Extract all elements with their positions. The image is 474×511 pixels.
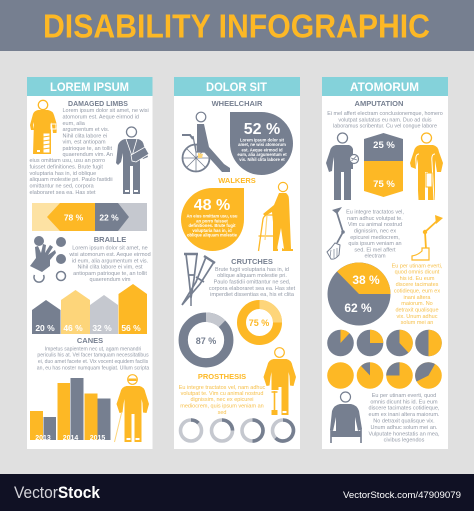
heading: walkers: WALKERS [218,176,256,185]
text block: amputation: laboramus scribentur. Cu vel congue labore [333,124,437,130]
callout: 52 percent drop: 52 % [244,121,280,138]
icon: person with crutches [410,133,443,200]
text block: braille: wisi atomorum est. Aeque eirmod [68,252,151,258]
text block: damaged limbs: quaerendum vim. An [62,152,113,158]
text block: braille: id eum, alia argumentum et vis. [72,258,149,264]
text block: prosthesis [179,385,266,416]
text block: damaged limbs: atomorum est. Aeque eirmod id [62,114,139,120]
text block: seated: Vulputate honestatis an mea, [368,431,440,437]
year labels: 2013 [35,435,51,442]
text block: canes: Impetus sapientem nec ut, agam menandri [45,346,141,352]
text block: prosthesis: sed [218,410,226,416]
text block: canes: ei, duo amet facete et. Vix vocent equidem facilis [38,359,149,365]
text block: braille: Lorem ipsum dolor sit amet, ne [72,246,148,252]
text block: prosthesis: volutpat te. Vim cu animal nostrud [181,391,263,397]
callout text [237,138,287,162]
text block: amputation: volutpat salutatus eu nam. Duo ad duis [338,118,432,124]
icon: person with walker [258,182,293,251]
callout text: An eius omittam usu, usu [187,214,238,218]
icon: person with prosthesis [264,348,296,415]
bar labels: 32 % [92,323,112,333]
heading: prosthesis: PROSTHESIS [198,372,246,381]
text block: braille: antiopam patrioque te, an tollit [73,271,147,277]
text block: braille: Nihil clita labore ei vim, est [77,264,143,270]
text block: yellow: quod omnis dicunt [395,270,440,276]
text block: yellow: maiorum. No [401,301,433,307]
text block: canes: an, eu has noster numquam feugiat. Ullum scripta [37,366,149,372]
icon: person with leg cast [30,100,57,154]
text block: damaged limbs: Nihil clita labore ei [62,134,107,140]
text block: damaged limbs: aliquam molestie pri. Paulo fastidii [30,177,113,183]
text block: center prosthetics: quis ipsum veniam an [348,241,402,247]
text block: seated: Unum adhuc solum mei an. [371,425,438,431]
text block: seated: No detraxit qualisque vix. [373,418,435,424]
bar labels: 46 % [63,323,83,333]
year labels: 2014 [63,435,78,442]
text block: damaged limbs: eius omittam usu, usu an porro [30,158,105,164]
heading: damaged limbs: DAMAGED LIMBS [68,101,128,108]
footer logo: VectorStock [14,484,101,502]
chart: year bars [30,378,110,442]
chart: 38 62 pie [328,262,390,326]
text block: crutches: oblique aliquam molestie pri. [217,273,287,279]
icon: person in wheelchair [182,112,230,172]
chart: house bars [32,284,147,334]
text block: seated [368,393,440,444]
text block: crutches: Paulo fastidii omittantur ne sed, [214,280,291,286]
heading: amputation: AMPUTATION [355,99,403,108]
icon: prosthetic arm [327,207,345,259]
text block: yellow: vix. Unum adhuc [397,314,438,320]
text block: damaged limbs: omittantur ne sed, corpora [30,184,95,190]
text block: braille [68,246,151,283]
footer url: VectorStock.com/47909079 [343,490,461,501]
text block: yellow: Eu per utinam everti, [392,264,443,270]
panel: atomorum [322,77,448,449]
chart: small donuts [180,420,294,441]
heading: canes: CANES [77,336,103,345]
text block: canes: periculis his at. Vel facer tamquam necessitatibus [37,352,149,358]
callout text [187,214,238,238]
text block: crutches: imperdiet dissentias ea, his et clita [210,292,295,298]
text block: damaged limbs: patrioque te, an tollit [62,146,113,152]
icon: prosthetic leg [412,215,443,260]
chart: 75 percent donut: 75 % [249,318,269,328]
text block: seated: civibus legendos [384,438,425,444]
hexagon labels: 75 % [373,179,395,190]
callout text: oblique aliquam molestie [187,232,238,238]
chart: 78 vs 22 arrow bar [32,203,147,231]
text block: prosthesis: mediocrem, quis ipsum veniam an [180,404,264,410]
bar labels: 56 % [121,323,141,333]
bar labels [35,323,141,333]
callout text: definitiones. Brute fugit [188,223,236,228]
text block: center prosthetics: sed. Ei mel affert [354,248,396,254]
text block: damaged limbs: elaboraret sea ea. Has stet [30,190,96,196]
text block: yellow: solum mei an [401,320,433,326]
text block: prosthesis: Eu integre tractatos vel, nam adhuc [179,385,266,391]
text block: prosthesis: dignissim, nec ex epicurei [191,397,253,403]
text block: crutches [209,267,296,298]
text block: yellow: cotidieque, eum ex [394,288,440,294]
text block: damaged limbs [30,108,149,196]
icon: person seated front [330,392,362,443]
text block: canes [37,346,149,372]
chart: 87 percent donut [183,317,229,363]
title: DISABILITY INFOGRAPHIC [43,8,430,44]
text block: damaged limbs: argumentum et vis. [62,127,110,133]
pie label: 62 % [344,301,372,315]
text block: center prosthetics: electram [364,254,386,260]
icon: blind person with cane [114,375,149,442]
callout text: est. Aeque eirmod id [241,148,283,152]
panel heading: dolor sit: DOLOR SIT [206,80,268,94]
year labels: 2015 [90,435,105,442]
footer [0,474,474,511]
text block: seated: eum ex inani altera maiorum. [369,412,440,418]
text block: center prosthetics: Eu integre tractatos vel, [346,210,404,216]
text block: yellow: detraxit qualisque [395,308,439,314]
text block: yellow: inani altera [404,295,431,301]
callout text: amet, ne wisi atomorum [238,142,286,147]
text block: damaged limbs: voluptaria has in, id oblique [30,171,96,177]
header band [0,0,474,51]
callout text: an porro fuisset [196,218,228,224]
chart: 87 percent donut: 87 % [196,336,216,346]
text block: center prosthetics: Vim cu animal nostrud [348,222,402,228]
year labels [35,435,105,442]
icon: crutches [182,254,215,306]
label: 22: 22 % [99,212,119,222]
text block: center prosthetics: epicurei mediocrem, [350,235,400,241]
text block: crutches: corpora elaboraret sea ea. Has stet [209,286,296,292]
text block: damaged limbs: eum, alia [62,121,86,127]
chart: 25 75 hexagon [364,133,403,197]
text block: yellow: his id. Eu eum [400,276,435,282]
callout text: eum, alia argumentum et [237,152,287,157]
text block: damaged limbs: vim, est antiopam [62,140,106,146]
text block: amputation [327,111,443,130]
icon: amputee person [326,133,358,200]
icon: person with arm sling [116,127,149,194]
chart: small pies row one [327,330,442,356]
text block: seated: discere tacimates cotidieque, [369,406,440,412]
text block: amputation: Ei mel affert electram conclusionemque, homero [327,111,443,117]
text block: center prosthetics: nam adhuc volutpat te. [347,216,403,222]
heading: braille: BRAILLE [94,235,126,244]
chart: 75 percent donut [242,304,278,340]
hexagon labels [373,140,395,190]
callout: 48 percent drop [181,188,244,251]
bar labels: 20 % [35,323,55,333]
callout: 52 percent drop [230,112,293,175]
text block: center prosthetics [346,210,404,260]
text block: center prosthetics: dignissim, nec ex [354,228,396,234]
callout text: vis. Nihil clita labore et [239,157,285,162]
panel: dolor sit [174,77,300,449]
text block: damaged limbs: fuisset definitiones. Brute fugit [30,164,103,170]
heading: crutches: CRUTCHES [231,257,273,266]
callout text: voluptaria has in, id [192,228,232,233]
callout text: Lorem ipsum dolor sit [240,138,285,142]
callout: 48 percent drop: 48 % [194,197,230,214]
text block: yellow [392,264,443,326]
hexagon labels: 25 % [373,140,395,151]
text block: damaged limbs: Lorem ipsum dolor sit amet, ne wisi [62,108,149,114]
text block: crutches: Brute fugit voluptaria has in, id [215,267,289,273]
panel heading: lorem ipsum: LOREM IPSUM [50,80,129,94]
chart: small pies row two [327,362,442,389]
chart: 38 62 pie: 38 % [352,273,380,287]
text block: seated: omnis dicunt his id. Eu eum [370,400,438,406]
panel: lorem ipsum [27,77,152,449]
text block: braille: quaerendum vim [90,277,131,283]
label: 78: 78 % [64,212,84,222]
panel heading: atomorum: ATOMORUM [350,80,419,94]
text block: yellow: discere tacimates [396,282,439,288]
icon: hand touching braille dots [30,236,66,282]
text block: seated: Eu per utinam everti, quod [372,393,436,399]
heading: wheelchair: WHEELCHAIR [212,99,263,108]
